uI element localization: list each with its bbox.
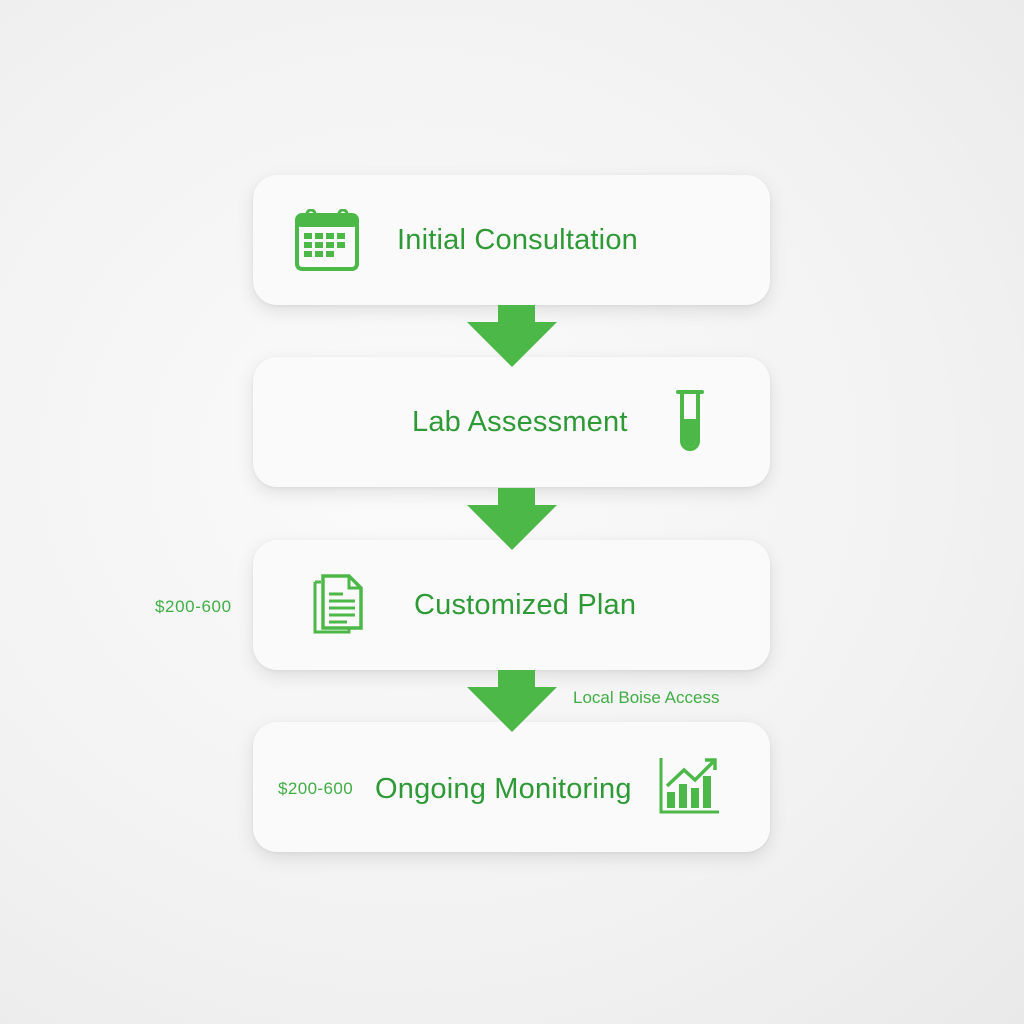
card: Customized Plan — [253, 540, 770, 670]
card: Initial Consultation — [253, 175, 770, 305]
side note: price left: $200-600 — [155, 597, 232, 616]
card: Lab Assessment — [253, 357, 770, 487]
side note: Local Boise Access: Local Boise Access — [573, 688, 719, 707]
icon: calendar — [295, 209, 359, 271]
icon: chart — [660, 758, 719, 814]
icon: documents — [314, 574, 363, 634]
icon: test tube — [676, 390, 704, 451]
heading: Customized Plan: Customized Plan — [414, 589, 636, 621]
heading: Ongoing Monitoring: Ongoing Monitoring — [375, 773, 632, 805]
arrow 2 — [467, 488, 557, 550]
card: Ongoing Monitoring — [253, 722, 770, 852]
price label: $200-600 — [278, 779, 353, 798]
heading: Lab Assessment: Lab Assessment — [412, 406, 628, 438]
arrow 3 — [467, 670, 557, 732]
arrow 1 — [467, 305, 557, 367]
heading: Initial Consultation: Initial Consultation — [397, 224, 638, 256]
